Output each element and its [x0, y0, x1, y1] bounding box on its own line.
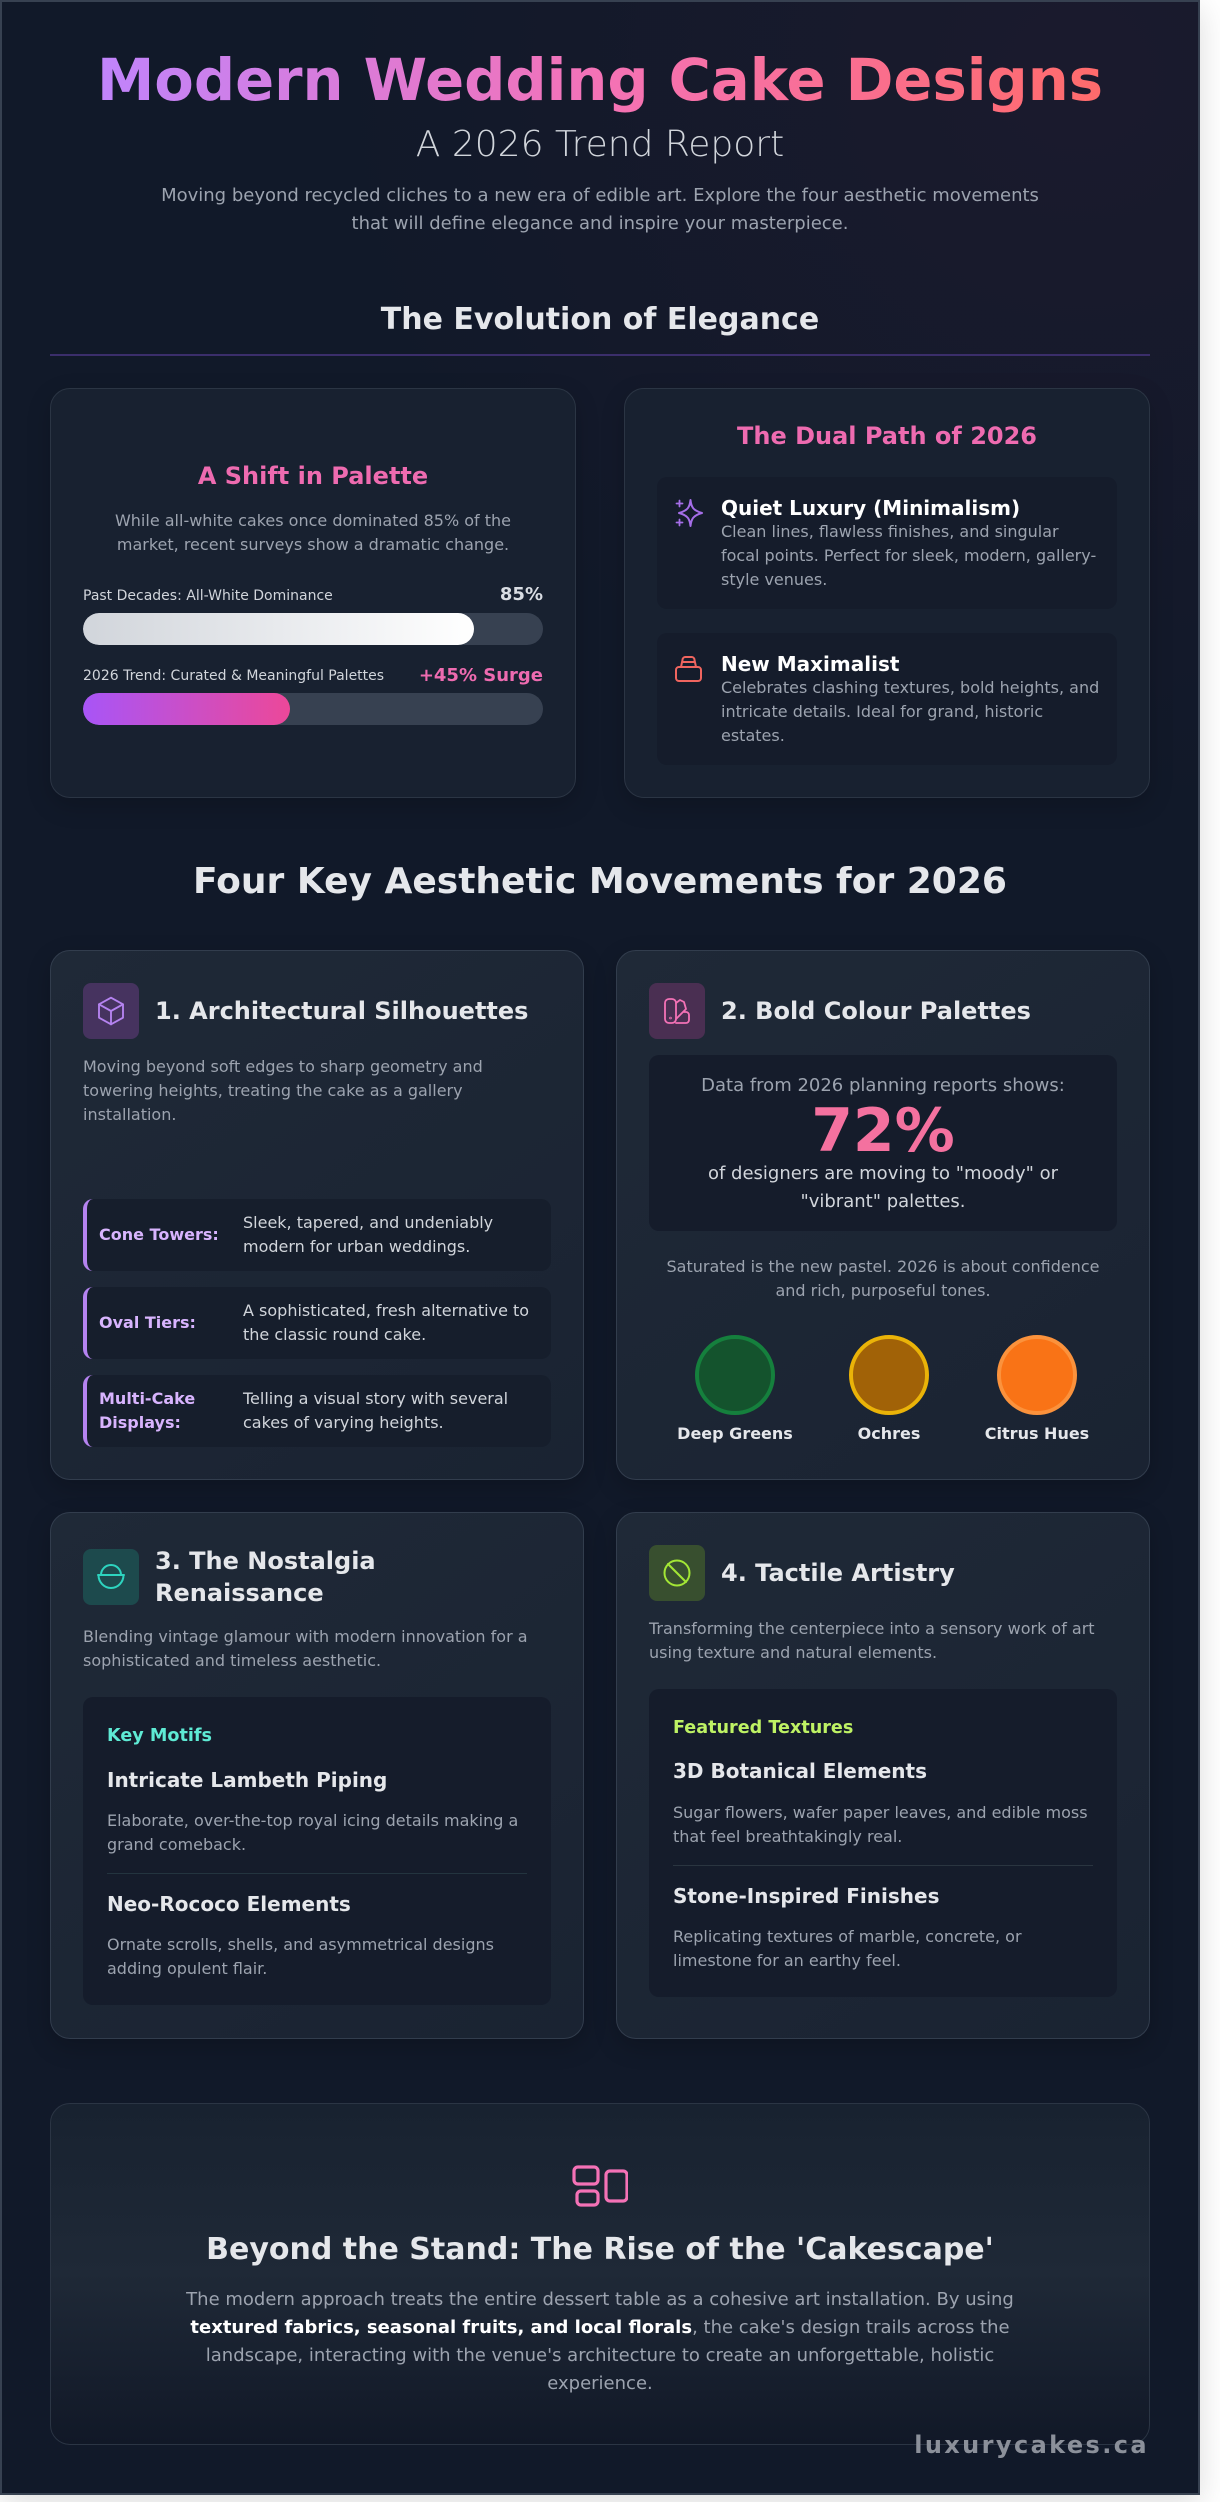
panel: 3 nostalgia renaissance [50, 1512, 584, 2039]
panel title: 3. The Nostalgia [155, 1547, 376, 1575]
panel description: Moving beyond soft edges to sharp geometry and [83, 1057, 483, 1076]
label: Multi-Cake [99, 1389, 195, 1408]
note: and rich, purposeful tones. [775, 1281, 991, 1300]
motif 2 heading: Neo-Rococo Elements [107, 1892, 351, 1916]
item text [721, 522, 1096, 589]
texture 2 text: limestone for an earthy feel. [673, 1951, 901, 1970]
stat text: of designers are moving to "moody" or [708, 1163, 1058, 1184]
panel description: Transforming the centerpiece into a sensory work of art [649, 1619, 1095, 1638]
motif 2 text: Ornate scrolls, shells, and asymmetrical designs [107, 1935, 494, 1954]
panel: the dual path [624, 388, 1150, 798]
description [243, 1301, 529, 1344]
bar 1 [83, 613, 543, 645]
description: Telling a visual story with several [243, 1389, 508, 1408]
card text: market, recent surveys show a dramatic change. [117, 535, 509, 554]
colour label: Ochres [858, 1424, 920, 1443]
colour label: Deep Greens [677, 1424, 793, 1443]
motif 1 text [107, 1811, 518, 1854]
panel: a shift in palette [50, 388, 576, 798]
icon: cube [83, 983, 139, 1039]
box heading: Key Motifs [107, 1726, 212, 1746]
motif 1 text: grand comeback. [107, 1835, 246, 1854]
description [243, 1213, 493, 1256]
panel title [155, 1547, 376, 1607]
panel: 4 tactile artistry [616, 1512, 1150, 2039]
item text: Clean lines, flawless finishes, and singular [721, 522, 1059, 541]
title: Modern Wedding Cake Designs [97, 47, 1103, 114]
section heading: movements: Four Key Aesthetic Movements for 2026 [193, 861, 1007, 902]
panel title: Renaissance [155, 1579, 324, 1607]
panel: beyond the stand [50, 2103, 1150, 2445]
label: Displays: [99, 1413, 181, 1432]
texture 1 text: Sugar flowers, wafer paper leaves, and edible moss [673, 1803, 1088, 1822]
panel heading: Beyond the Stand: The Rise of the 'Cakescape' [206, 2232, 994, 2267]
label: Oval Tiers: [99, 1313, 196, 1332]
panel title: 1. Architectural Silhouettes [155, 997, 528, 1025]
item heading: New Maximalist [721, 652, 899, 676]
header [97, 47, 1103, 234]
bar 2 [83, 693, 543, 725]
icon: sparkles [676, 499, 703, 527]
colour circle [695, 1335, 775, 1415]
intro text: that will define elegance and inspire your masterpiece. [352, 213, 848, 234]
textures box [649, 1689, 1117, 1997]
panel description [83, 1627, 528, 1670]
intro text: Moving beyond recycled cliches to a new era of edible art. Explore the four aesthetic movements [161, 185, 1039, 206]
panel title: 2. Bold Colour Palettes [721, 997, 1031, 1025]
motif 2 text: adding opulent flair. [107, 1959, 267, 1978]
stat text: "vibrant" palettes. [800, 1191, 966, 1212]
description: modern for urban weddings. [243, 1237, 470, 1256]
item text: estates. [721, 726, 785, 745]
stat box [649, 1055, 1117, 1231]
icon: layout blocks [572, 2165, 628, 2207]
card text [115, 511, 511, 554]
item text: intricate details. Ideal for grand, historic [721, 702, 1043, 721]
icon: layered cake [675, 656, 702, 682]
item text [721, 678, 1099, 745]
panel title: 4. Tactile Artistry [721, 1559, 955, 1587]
texture 2 text [673, 1927, 1022, 1970]
swatch: deep greens [677, 1335, 793, 1443]
label [99, 1389, 195, 1432]
colour circle [849, 1335, 929, 1415]
stat text [708, 1163, 1058, 1212]
panel text: experience. [547, 2373, 653, 2394]
list item: cone towers [83, 1199, 551, 1271]
texture 2 text: Replicating textures of marble, concrete, or [673, 1927, 1022, 1946]
subtitle: A 2026 Trend Report [416, 124, 784, 165]
panel text [186, 2289, 1014, 2394]
texture 1 heading: 3D Botanical Elements [673, 1759, 927, 1783]
note: Saturated is the new pastel. 2026 is about confidence [666, 1257, 1100, 1276]
bar value 1: 85% [500, 584, 543, 605]
panel description [648, 1619, 1095, 1662]
box heading: Featured Textures [673, 1718, 853, 1738]
card heading: The Dual Path of 2026 [737, 422, 1037, 450]
motifs box [83, 1697, 551, 2005]
intro text [161, 185, 1039, 234]
section rule [50, 354, 1150, 356]
motif 1 text: Elaborate, over-the-top royal icing details making a [107, 1811, 518, 1830]
panel text: landscape, interacting with the venue's architecture to create an unforgettable, holistic [206, 2345, 994, 2366]
bar value 2: +45% Surge [419, 665, 543, 686]
panel text: The modern approach treats the entire dessert table as a cohesive art installation. By using [186, 2289, 1014, 2310]
texture 2 heading: Stone-Inspired Finishes [673, 1884, 940, 1908]
colour circle [997, 1335, 1077, 1415]
motif 2 text [107, 1935, 494, 1978]
swatch: ochres [849, 1335, 929, 1443]
watermark: luxurycakes.ca [914, 2431, 1149, 2459]
item text: Celebrates clashing textures, bold heights, and [721, 678, 1099, 697]
panel description: towering heights, treating the cake as a gallery [83, 1081, 463, 1100]
panel description: installation. [83, 1105, 176, 1124]
bar label 2: 2026 Trend: Curated & Meaningful Palettes [83, 668, 384, 684]
description [242, 1389, 508, 1432]
description: the classic round cake. [243, 1325, 426, 1344]
panel description: sophisticated and timeless aesthetic. [83, 1651, 381, 1670]
list item: oval tiers [83, 1287, 551, 1359]
icon: bowl [83, 1549, 139, 1605]
panel description: using texture and natural elements. [649, 1643, 937, 1662]
note [666, 1257, 1100, 1300]
big number: 72% [811, 1096, 955, 1166]
texture 1 text: that feel breathtakingly real. [673, 1827, 902, 1846]
colour label: Citrus Hues [985, 1424, 1089, 1443]
texture 1 text [673, 1803, 1088, 1846]
panel text: textured fabrics, seasonal fruits, and local florals, the cake's design trails across the [190, 2317, 1010, 2338]
description: A sophisticated, fresh alternative to [243, 1301, 529, 1320]
label: Cone Towers: [99, 1225, 219, 1244]
card text: While all-white cakes once dominated 85% of the [115, 511, 511, 530]
description: cakes of varying heights. [243, 1413, 444, 1432]
card heading: A Shift in Palette [198, 462, 428, 490]
icon: circle slash [649, 1545, 705, 1601]
item heading: Quiet Luxury (Minimalism) [721, 496, 1020, 520]
bar label 1: Past Decades: All-White Dominance [83, 588, 333, 604]
panel: 1 architectural silhouettes [50, 950, 584, 1480]
panel: 2 bold colour palettes [616, 950, 1150, 1480]
swatch: citrus hues [985, 1335, 1089, 1443]
item text: style venues. [721, 570, 827, 589]
list item: multi-cake displays [83, 1375, 551, 1447]
item text: focal points. Perfect for sleek, modern, gallery- [721, 546, 1096, 565]
item: quiet luxury [657, 477, 1117, 609]
section heading: evolution: The Evolution of Elegance [381, 302, 819, 337]
icon: swatch [649, 983, 705, 1039]
panel description [83, 1057, 483, 1124]
panel description: Blending vintage glamour with modern innovation for a [83, 1627, 528, 1646]
item: new maximalist [657, 633, 1117, 765]
description: Sleek, tapered, and undeniably [243, 1213, 493, 1232]
stat intro: Data from 2026 planning reports shows: [701, 1075, 1065, 1096]
motif 1 heading: Intricate Lambeth Piping [107, 1768, 387, 1792]
